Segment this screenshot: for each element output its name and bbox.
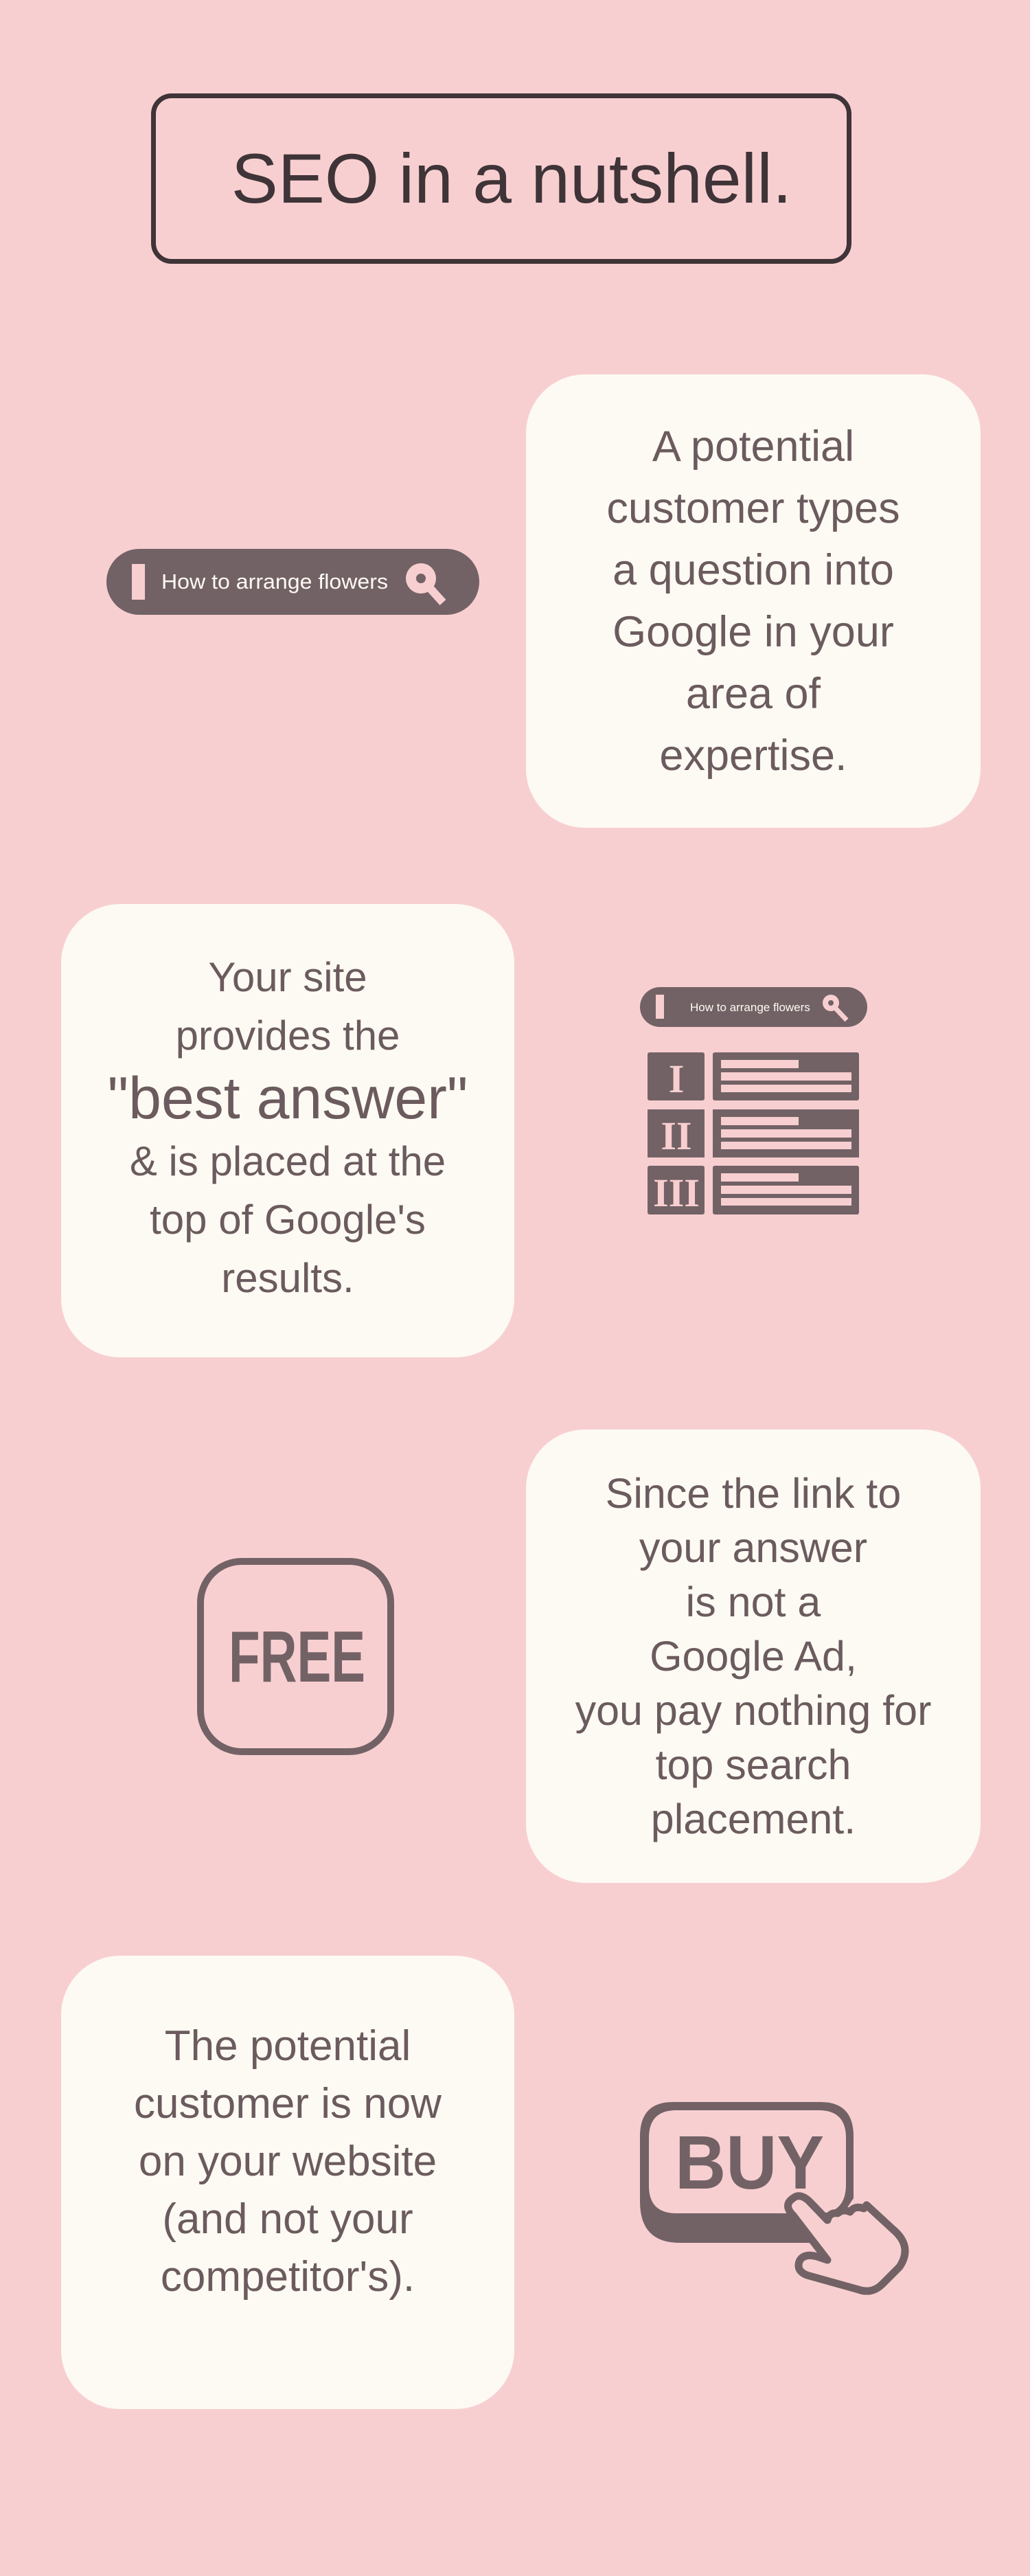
card 2 text: "best answer" — [108, 1065, 468, 1131]
card 1 text: a question into — [613, 546, 894, 594]
card 2 text: top of Google's — [150, 1197, 426, 1242]
card 3 text: placement. — [651, 1796, 856, 1842]
card 2 text — [61, 904, 514, 1357]
card 3 text: Google Ad, — [650, 1632, 857, 1679]
card 1 text: A potential — [652, 422, 854, 471]
icon: BUY button with hand: BUY — [675, 2121, 824, 2205]
card 1 text: customer types — [606, 484, 900, 532]
card 3 text: top search — [656, 1741, 851, 1787]
icon: search results list: III — [653, 1171, 700, 1215]
icon: search bar — [106, 549, 479, 615]
card 3 text: Since the link to — [606, 1470, 901, 1517]
title: SEO in a nutshell. — [231, 139, 792, 217]
card 1 text — [526, 374, 981, 828]
title — [151, 93, 851, 264]
icon: search results list: I — [669, 1057, 684, 1101]
card 4 text: on your website — [139, 2138, 437, 2185]
card 2 text: results. — [221, 1254, 354, 1301]
card 4 text: competitor's). — [161, 2253, 415, 2301]
card 3 text: you pay nothing for — [575, 1687, 931, 1734]
card 4 text: The potential — [165, 2022, 411, 2070]
card 4 text — [61, 1956, 514, 2409]
card 1 text: expertise. — [659, 732, 847, 780]
icon: search results list: II — [661, 1114, 692, 1158]
icon: search results list: How to arrange flowers — [690, 1001, 810, 1014]
card 4 text: customer is now — [134, 2080, 442, 2127]
card 4 text: (and not your — [162, 2195, 413, 2243]
card 2 text: & is placed at the — [130, 1138, 446, 1184]
card 3 text: your answer — [639, 1524, 867, 1570]
card 3 text — [526, 1430, 981, 1883]
card 2 text: provides the — [176, 1013, 400, 1058]
icon: FREE — [197, 1558, 394, 1755]
card 3 text: is not a — [686, 1579, 821, 1625]
icon: search results list — [640, 987, 867, 1215]
icon: search bar: How to arrange flowers — [161, 569, 388, 594]
card 1 text: area of — [686, 670, 821, 718]
card 2 text: Your site — [208, 953, 367, 1000]
card 1 text: Google in your — [613, 608, 894, 656]
icon: BUY button with hand — [640, 2102, 909, 2295]
